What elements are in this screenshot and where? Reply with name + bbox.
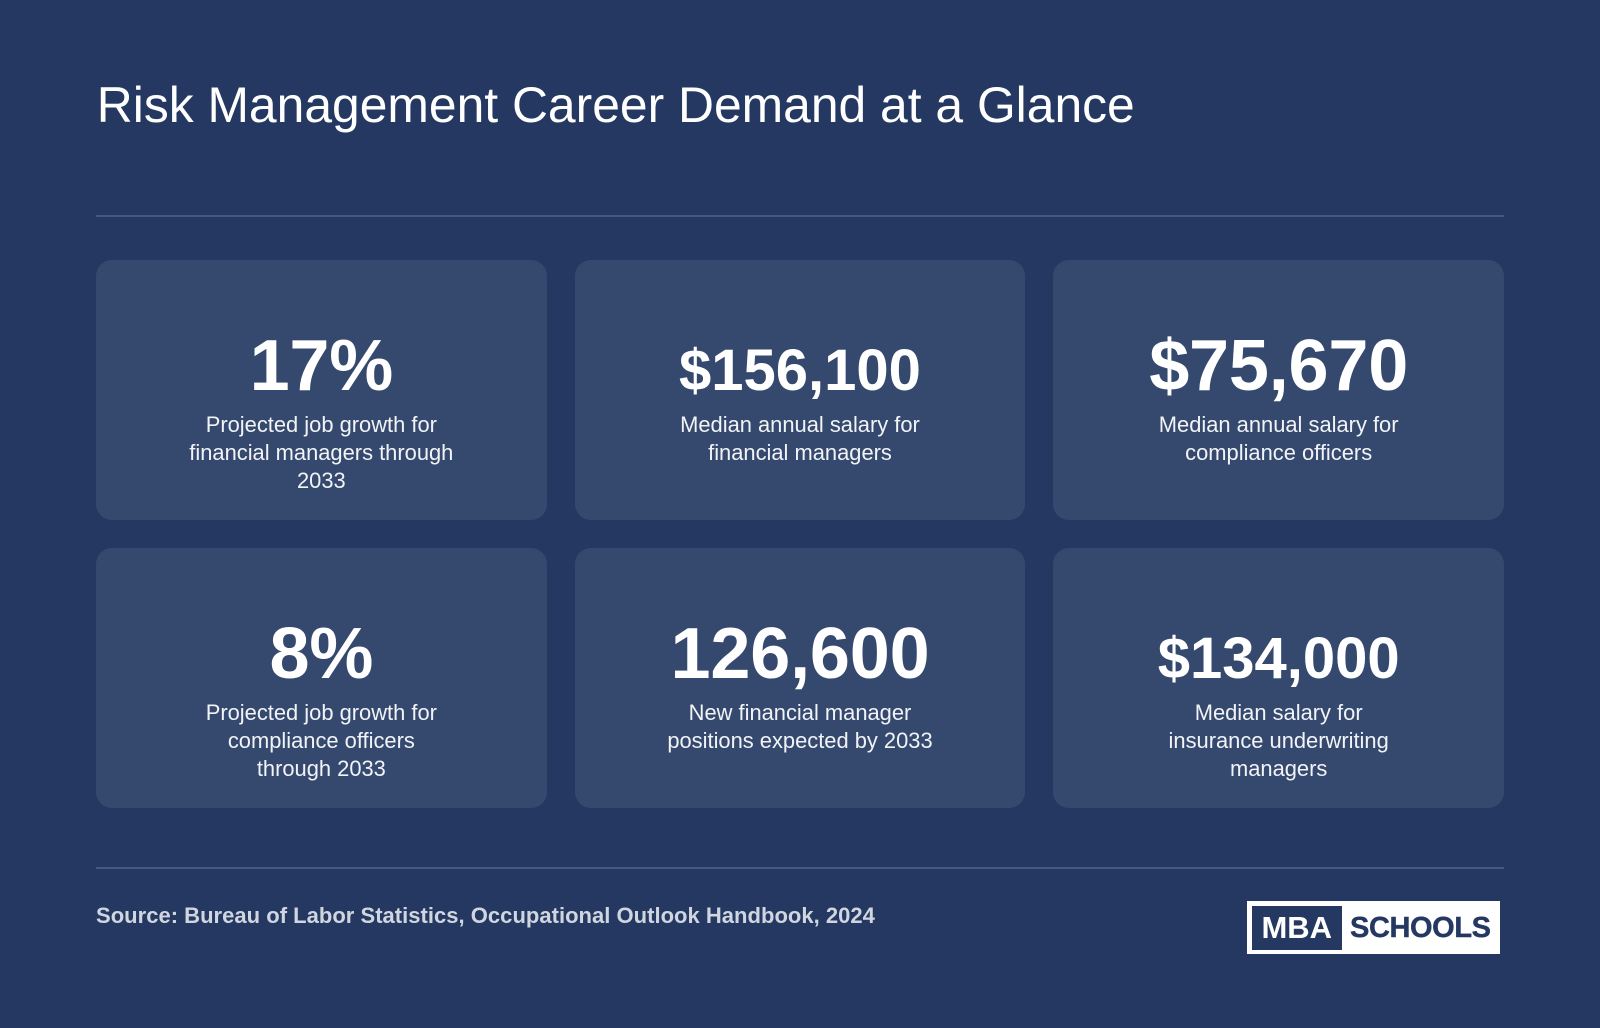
description: financial manager growth: 2033 <box>297 468 346 493</box>
stat: $156,100: $156,100 <box>679 338 921 403</box>
logo box: MBA <box>1252 906 1342 950</box>
description: compliance officer salary: compliance officers <box>1185 440 1372 465</box>
description: financial manager growth <box>189 412 453 493</box>
description: underwriting manager salary: managers <box>1230 756 1327 781</box>
panel: 17% job growth <box>96 260 547 520</box>
title: Risk Management Career Demand at a Glance <box>97 77 1135 133</box>
description: compliance officer growth <box>206 700 437 781</box>
panel: $75,670 salary <box>1053 260 1504 520</box>
stat: 8%: 8% <box>269 614 373 694</box>
panel: $156,100 salary <box>575 260 1025 520</box>
description: underwriting manager salary <box>1169 700 1389 781</box>
description: new positions <box>667 700 933 753</box>
source note: Source: Bureau of Labor Statistics, Occupational Outlook Handbook, 2024 <box>96 903 875 928</box>
description: compliance officer growth: Projected job growth for <box>206 700 437 725</box>
description: underwriting manager salary: Median salary for <box>1195 700 1363 725</box>
stat: $75,670: $75,670 <box>1149 326 1408 406</box>
panel: 8% job growth <box>96 548 547 808</box>
description: compliance officer growth: compliance officers <box>228 728 415 753</box>
description: financial manager growth: financial managers through <box>189 440 453 465</box>
stat: $134,000: $134,000 <box>1158 626 1400 691</box>
description: financial manager salary <box>680 412 920 465</box>
description: compliance officer salary: Median annual salary for <box>1159 412 1399 437</box>
description: new positions: New financial manager <box>689 700 911 725</box>
description: financial manager salary: Median annual salary for <box>680 412 920 437</box>
description: compliance officer growth: through 2033 <box>257 756 386 781</box>
stat: 17%: 17% <box>250 326 393 406</box>
description: underwriting manager salary: insurance underwriting <box>1169 728 1389 753</box>
description: compliance officer salary <box>1159 412 1399 465</box>
description: financial manager salary: financial managers <box>708 440 892 465</box>
stat: 126,600: 126,600 <box>671 614 929 694</box>
logo text: SCHOOLS: SCHOOLS <box>1350 912 1491 944</box>
description: financial manager growth: Projected job growth for <box>206 412 437 437</box>
panel: $134,000 salary <box>1053 548 1504 808</box>
description: new positions: positions expected by 2033 <box>667 728 933 753</box>
logo box: MBA: MBA <box>1261 910 1332 945</box>
logo: MBA Schools <box>1247 901 1500 954</box>
panel: 126,600 positions <box>575 548 1025 808</box>
